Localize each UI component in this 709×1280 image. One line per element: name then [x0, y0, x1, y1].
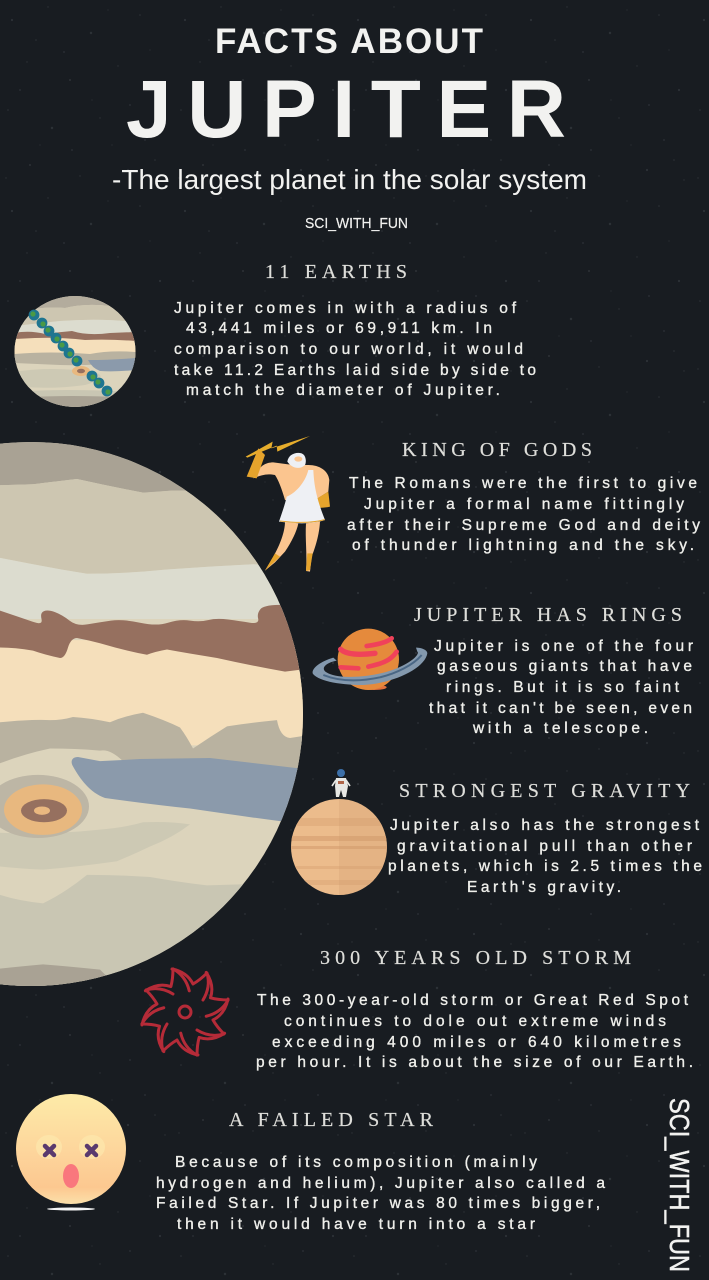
illustration: Zeus with lightning bolt	[246, 436, 330, 572]
text: gravity: Jupiter also has the strongest	[390, 817, 700, 834]
heading: rings: JUPITER HAS RINGS	[414, 604, 682, 626]
text: failed star: Failed Star. If Jupiter was 80 times bigger,	[156, 1195, 600, 1212]
text: king of gods	[347, 475, 700, 554]
lightning bolt	[246, 436, 310, 458]
legs	[265, 522, 298, 571]
astronaut	[332, 769, 350, 797]
brown band	[0, 605, 310, 672]
subtitle: -The largest planet in the solar system	[112, 164, 587, 195]
tunic	[279, 470, 325, 523]
illustration: large Jupiter	[0, 429, 310, 1009]
bottom dark band	[0, 964, 106, 986]
text: 11 earths: 43,441 miles or 69,911 km. In	[186, 320, 492, 337]
row of Earths	[29, 310, 112, 396]
title: facts about: FACTS ABOUT	[215, 22, 483, 61]
icon: failed star face	[16, 1094, 126, 1210]
text: king of gods: The Romans were the first to give	[349, 475, 697, 492]
text: gravity: gravitational pull than other	[397, 838, 692, 855]
text: storm: per hour. It is about the size of our Earth.	[256, 1054, 693, 1071]
watermark: top: SCI_WITH_FUN	[305, 215, 408, 232]
heading: storm: 300 YEARS OLD STORM	[320, 947, 631, 969]
beige band	[0, 479, 258, 574]
illustration: small Jupiter with Earths	[14, 295, 136, 410]
ring front	[313, 648, 427, 685]
text: gravity	[388, 817, 702, 896]
text: 11 earths: take 11.2 Earths laid side by side to	[174, 362, 536, 379]
text: failed star: then it would have turn into a star	[177, 1216, 535, 1233]
heading: 11 earths: 11 EARTHS	[265, 261, 407, 283]
text: 11 earths: Jupiter comes in with a radius of	[174, 300, 517, 317]
text: 11 earths: match the diameter of Jupiter.	[186, 382, 500, 399]
pale band	[0, 558, 310, 619]
text: 11 earths: comparison to our world, it would	[174, 341, 523, 358]
text: 11 earths	[174, 300, 536, 399]
text: rings: that it can't be seen, even	[429, 700, 692, 717]
head and beard	[287, 453, 306, 468]
lower gauntlet	[307, 492, 330, 508]
text: gravity: Earth's gravity.	[467, 879, 621, 896]
text: failed star	[156, 1154, 605, 1233]
great red spot	[0, 775, 89, 838]
text: failed star: Because of its composition (mainly	[175, 1154, 537, 1171]
heading: king of gods: KING OF GODS	[402, 439, 592, 461]
blue band	[72, 757, 310, 821]
heading: gravity: STRONGEST GRAVITY	[399, 780, 690, 802]
illustration: planet with astronaut	[290, 769, 388, 896]
eye highlights	[36, 1135, 105, 1159]
title: jupiter: JUPITER	[126, 64, 566, 155]
text: king of gods: of thunder lightning and the sky.	[352, 537, 694, 554]
text: failed star: hydrogen and helium), Jupiter also called a	[156, 1175, 605, 1192]
grey band	[0, 713, 310, 773]
text: storm: The 300-year-old storm or Great Red Spot	[257, 992, 689, 1009]
top dark band	[0, 442, 186, 492]
text: rings: with a telescope.	[472, 720, 648, 737]
text: storm: continues to dole out extreme winds	[284, 1013, 666, 1030]
text: rings	[429, 638, 693, 737]
text: storm: exceeding 400 miles or 640 kilometres	[272, 1034, 681, 1051]
raised gauntlet	[247, 448, 265, 478]
torso and arms	[253, 462, 329, 505]
text: rings: Jupiter is one of the four	[434, 638, 693, 655]
lower band 1	[0, 822, 190, 870]
text: gravity: planets, which is 2.5 times the	[388, 858, 702, 875]
text: rings: rings. But it is so faint	[446, 679, 680, 696]
heading: failed star: A FAILED STAR	[229, 1109, 434, 1131]
lower band 2	[0, 875, 243, 986]
illustration: ringed planet	[313, 629, 427, 690]
cream band	[0, 640, 310, 745]
text: king of gods: Jupiter a formal name fittingly	[364, 496, 684, 513]
text: storm	[256, 992, 693, 1071]
icon: storm	[138, 965, 232, 1059]
text: king of gods: after their Supreme God and deity	[347, 517, 700, 534]
text: rings: gaseous giants that have	[437, 658, 692, 675]
